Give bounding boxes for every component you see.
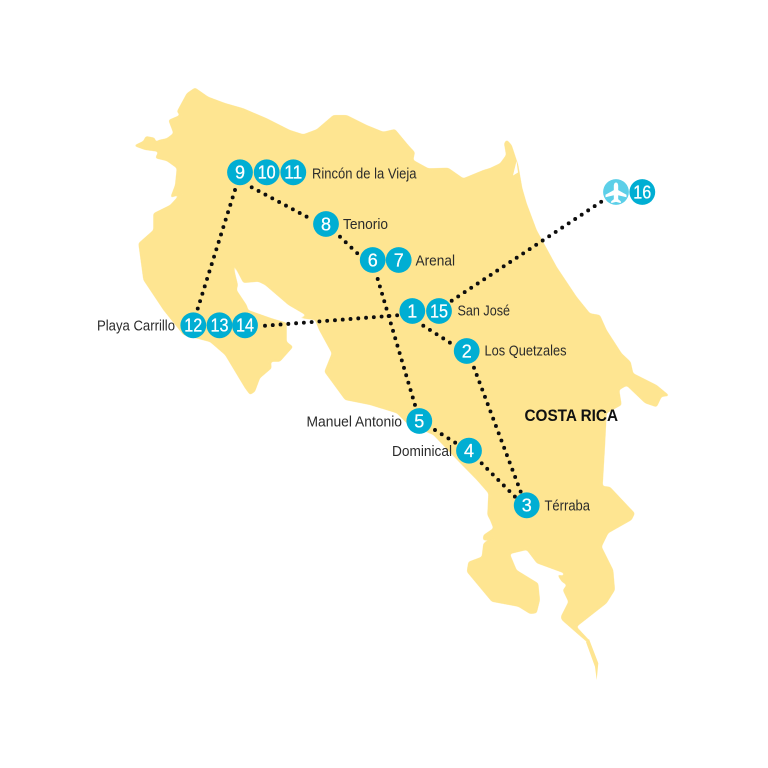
stop marker: Manuel Antonio 5: 5 [414, 411, 424, 431]
stop marker: Tenorio 8 [313, 211, 339, 237]
stop markers: Arenal 6, 7 [360, 247, 412, 273]
stop markers: Rincón de la Vieja 9, 10, 11: 9 [235, 163, 245, 183]
stop markers: Playa Carrillo 12, 13, 14: 13 [210, 316, 228, 336]
label: Dominical: Dominical [392, 443, 452, 460]
stop markers: San José 1, 15 [399, 298, 452, 324]
stop markers: Rincón de la Vieja 9, 10, 11: 11 [284, 163, 302, 183]
stop marker: Dominical 4 [456, 438, 482, 464]
label: Tenorio: Tenorio [343, 216, 388, 233]
label: Térraba: Térraba [544, 498, 591, 514]
label: Los Quetzales: Los Quetzales [484, 342, 566, 360]
stop markers: San José 1, 15: 1 [407, 301, 417, 321]
stop markers: Arenal 6, 7: 7 [394, 250, 404, 270]
stop markers: Playa Carrillo 12, 13, 14: 14 [236, 316, 254, 336]
route: dotted travel lines [198, 187, 601, 497]
stop markers: Rincón de la Vieja 9, 10, 11 [227, 159, 306, 185]
stop markers: Rincón de la Vieja 9, 10, 11: 10 [258, 163, 276, 183]
stop marker: Dominical 4: 4 [464, 441, 474, 461]
map: Costa Rica land mass [133, 88, 670, 680]
stop markers: Arenal 6, 7: 6 [368, 250, 378, 270]
stop marker: departure 16 [629, 179, 655, 205]
label: Playa Carrillo: Playa Carrillo [97, 318, 175, 334]
stop markers: Playa Carrillo 12, 13, 14 [180, 312, 258, 338]
stop marker: Térraba 3: 3 [522, 496, 532, 516]
stop marker: Térraba 3 [514, 492, 540, 518]
label: Arenal: Arenal [416, 252, 455, 270]
icon: airplane departure marker [603, 179, 629, 205]
stop marker: Tenorio 8: 8 [321, 214, 331, 234]
stop marker: Los Quetzales 2 [454, 338, 480, 364]
label: Rincón de la Vieja: Rincón de la Vieja [312, 166, 417, 182]
stop markers: San José 1, 15: 15 [430, 301, 448, 321]
label: country name: COSTA RICA [524, 407, 618, 425]
stop marker: departure 16: 16 [633, 182, 651, 202]
stop marker: Los Quetzales 2: 2 [462, 341, 472, 361]
stop markers: Playa Carrillo 12, 13, 14: 12 [184, 316, 202, 336]
label: San José: San José [458, 302, 510, 320]
stop marker: Manuel Antonio 5 [406, 408, 432, 434]
label: Manuel Antonio: Manuel Antonio [306, 414, 402, 430]
